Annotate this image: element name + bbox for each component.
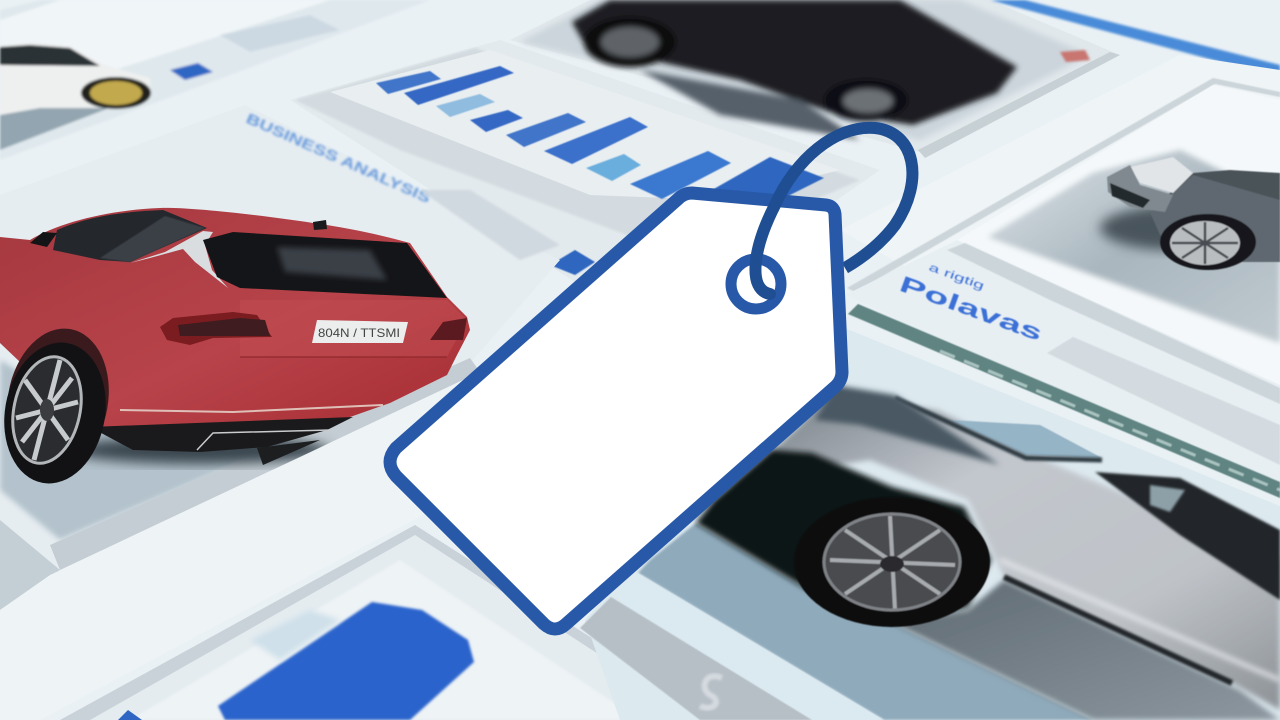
caption: blurred blue heading: BUSINESS ANALYSIS bbox=[243, 110, 433, 207]
panel: large silver car listing bbox=[580, 326, 1280, 720]
front dark blob bbox=[696, 450, 991, 623]
windscreen bbox=[950, 420, 1102, 458]
trunk highlight bbox=[240, 300, 467, 357]
line: frame edge bbox=[918, 52, 1120, 158]
accent: blue top stripe bbox=[990, 0, 1280, 78]
panel: top-left white car listing bbox=[0, 0, 430, 160]
bumper bbox=[90, 417, 353, 452]
icon: white car bbox=[0, 42, 151, 115]
heading: blurred pricing text: Polavas bbox=[896, 271, 1046, 346]
strip: light bbox=[611, 573, 884, 720]
bar chart bbox=[376, 66, 824, 275]
tag string back bbox=[845, 128, 912, 268]
rear window bbox=[203, 232, 447, 298]
icon: front wheel bbox=[794, 497, 990, 627]
car side window bbox=[53, 210, 207, 262]
chrome pillar bbox=[130, 231, 228, 288]
price tag bbox=[390, 128, 912, 629]
tail lights bbox=[160, 312, 467, 345]
chrome line bbox=[120, 405, 383, 412]
license plate bbox=[312, 320, 408, 343]
hood dark bbox=[815, 385, 1000, 465]
band: green dashed strip bbox=[848, 304, 1280, 498]
mirror bbox=[30, 232, 57, 247]
tag eyelet bbox=[731, 259, 781, 309]
panel: top dark car listing bbox=[510, 0, 1280, 158]
band: grey toolbar bbox=[947, 243, 1280, 404]
icon: grey sports car bbox=[1100, 157, 1280, 270]
panel: red car listing bbox=[0, 105, 560, 610]
line: inner frame edge bbox=[847, 78, 1280, 292]
panel: right small car listing bbox=[840, 55, 1280, 420]
icon: blue blurred shape bbox=[218, 602, 474, 720]
band: grey diagonal bbox=[50, 358, 480, 570]
floor: blue road bbox=[638, 523, 1093, 720]
roof fin bbox=[313, 220, 327, 230]
tag body bbox=[390, 193, 842, 629]
icon: red car bbox=[0, 208, 470, 492]
side window bbox=[1095, 472, 1280, 600]
strip: white diagonal divider bbox=[0, 300, 600, 720]
icon: silver car bbox=[696, 385, 1280, 710]
small blurred text: a rigtig bbox=[927, 262, 986, 293]
icon: black car bbox=[572, 0, 1017, 140]
wheel arch bbox=[0, 320, 120, 480]
panel: right pricing listing bbox=[845, 240, 1280, 490]
panel: chart listing bbox=[290, 40, 880, 330]
icon: rear wheel bbox=[0, 334, 117, 492]
mark: grey letter on strip bbox=[700, 676, 722, 708]
chip: blue mark bbox=[170, 63, 213, 80]
road under car bbox=[892, 580, 1280, 720]
tag string front bbox=[755, 128, 875, 294]
license plate: 804N / TTSMI bbox=[318, 326, 400, 340]
panel: bottom blue shape listing bbox=[60, 525, 720, 720]
strip: grey bbox=[580, 597, 812, 720]
